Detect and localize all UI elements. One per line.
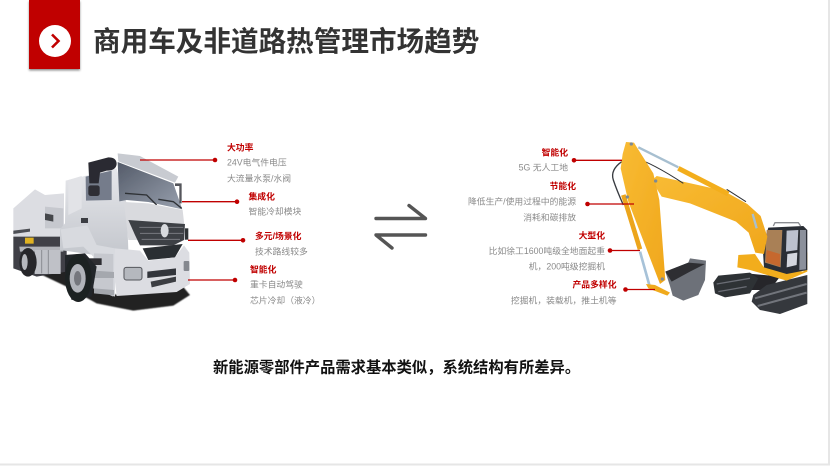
bumper <box>114 245 190 296</box>
callout: 集成化: 集成化 <box>248 190 275 202</box>
steps <box>94 253 113 297</box>
callout: 节能化: 降低生产/使用过程中的能源 <box>468 196 576 206</box>
callout: 大型化: 机，200吨级挖掘机 <box>529 260 605 272</box>
trailer <box>13 189 64 237</box>
callout: 大功率: 24V电气件电压 <box>227 156 287 168</box>
callout: 智能化 (truck): 芯片冷却（液冷） <box>250 294 320 306</box>
callout: 智能化 (excavator) <box>519 146 622 172</box>
callout: 智能化 (truck) <box>188 264 320 306</box>
callout: 产品多样化 <box>511 278 655 306</box>
callout: 多元/场景化 <box>188 230 308 256</box>
callout: 智能化 (excavator): 智能化 <box>542 146 568 158</box>
cab <box>763 226 807 274</box>
callout: 集成化: 智能冷却模块 <box>248 206 301 216</box>
mirrors <box>88 157 117 183</box>
callout: 大功率: 大流量水泵/水阀 <box>227 172 291 184</box>
callout: 多元/场景化: 多元/场景化 <box>255 230 302 241</box>
rear wheel <box>19 248 37 277</box>
roof <box>118 153 178 183</box>
arm cylinder <box>623 195 640 249</box>
header badge <box>29 0 80 69</box>
arm <box>621 142 665 284</box>
cab side <box>60 168 128 255</box>
callout: 智能化 (excavator): 5G 无人工地 <box>519 162 568 172</box>
callout: 智能化 (truck): 智能化 <box>250 264 277 274</box>
grille <box>128 220 185 245</box>
title: 商用车及非道路热管理市场趋势 <box>93 26 479 57</box>
face panel <box>124 202 186 240</box>
callout: 大型化 <box>489 230 640 272</box>
callout: 产品多样化: 挖掘机，装载机，推土机等 <box>511 294 617 306</box>
front wheel <box>65 253 97 300</box>
truck shadow <box>35 270 190 311</box>
main boom <box>652 176 767 254</box>
conclusion text: 新能源零部件产品需求基本类似，系统结构有所差异。 <box>213 358 580 376</box>
callout: 多元/场景化: 技术路线较多 <box>255 246 308 256</box>
callout: 节能化: 消耗和碳排放 <box>523 212 576 222</box>
hoses <box>623 156 746 202</box>
callout: 节能化: 节能化 <box>550 180 576 191</box>
bucket <box>665 258 706 301</box>
callout: 大型化: 大型化 <box>579 230 605 240</box>
callout: 智能化 (truck): 重卡自动驾驶 <box>250 278 303 290</box>
excavator illustration <box>613 142 807 314</box>
icon: two-way arrows <box>376 206 426 248</box>
undercarriage <box>747 273 780 290</box>
callout: 大功率 <box>140 142 291 184</box>
callout: 大功率: 大功率 <box>227 142 254 152</box>
boom cylinder <box>638 147 678 167</box>
windscreen <box>118 162 182 209</box>
truck illustration <box>13 153 190 311</box>
callout: 大型化: 比如徐工1600吨级全地面起重 <box>489 245 605 256</box>
turret body <box>737 252 807 281</box>
tracks <box>713 273 758 297</box>
side window <box>86 171 112 201</box>
callout: 节能化 <box>468 180 634 222</box>
callout: 产品多样化: 产品多样化 <box>572 278 617 290</box>
callout: 集成化 <box>182 190 301 216</box>
pivots <box>630 142 633 146</box>
chassis <box>13 237 67 277</box>
linkage <box>646 284 670 296</box>
